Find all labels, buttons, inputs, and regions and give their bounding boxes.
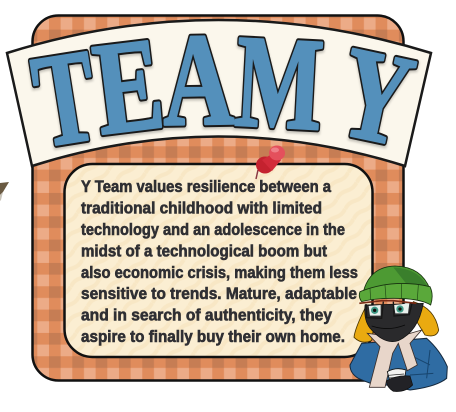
title banner	[7, 6, 431, 178]
description text: traditional childhood with limited	[81, 200, 322, 218]
hair left	[354, 308, 375, 342]
title text: E	[87, 13, 171, 165]
title text: E	[87, 11, 171, 163]
description text: Y Team values resilience between a	[81, 178, 332, 196]
character: person with green beanie, glasses, scarf and coffee	[350, 266, 447, 392]
title text: M	[232, 10, 326, 160]
glasses	[366, 302, 412, 318]
description text	[81, 178, 358, 346]
beanie brim	[359, 283, 432, 305]
description text: and in search of authenticity, they	[81, 307, 333, 325]
icon: red push pin	[256, 146, 285, 179]
coffee cup	[387, 369, 406, 382]
head	[365, 303, 423, 342]
title text: Y	[328, 19, 425, 174]
cropped brown fragment at left edge	[0, 182, 9, 201]
scarf	[367, 330, 422, 387]
title text: M	[232, 8, 326, 158]
glove	[387, 376, 413, 392]
title text: T	[24, 24, 106, 178]
title text: A	[162, 6, 235, 154]
title text: A	[162, 8, 235, 156]
title text: Y	[328, 21, 425, 176]
description text: technology and an adolescence in the	[81, 221, 345, 239]
panel: gingham card	[32, 16, 404, 380]
title text: Y	[328, 19, 425, 174]
title text: A	[162, 6, 235, 154]
title text: M	[232, 8, 326, 158]
title text: T	[24, 22, 106, 176]
hair right	[412, 302, 439, 336]
beanie dome	[363, 266, 430, 295]
title text: T	[24, 22, 106, 176]
title text	[24, 6, 425, 178]
description text: midst of a technological boom but	[81, 242, 327, 260]
title text: E	[87, 11, 171, 163]
description text: aspire to finally buy their own home.	[81, 328, 345, 346]
jacket	[350, 338, 447, 390]
eyes	[369, 305, 381, 316]
description text: sensitive to trends. Mature, adaptable	[81, 285, 357, 303]
description text: also economic crisis, making them less	[81, 264, 358, 282]
panel: description box	[64, 164, 372, 357]
